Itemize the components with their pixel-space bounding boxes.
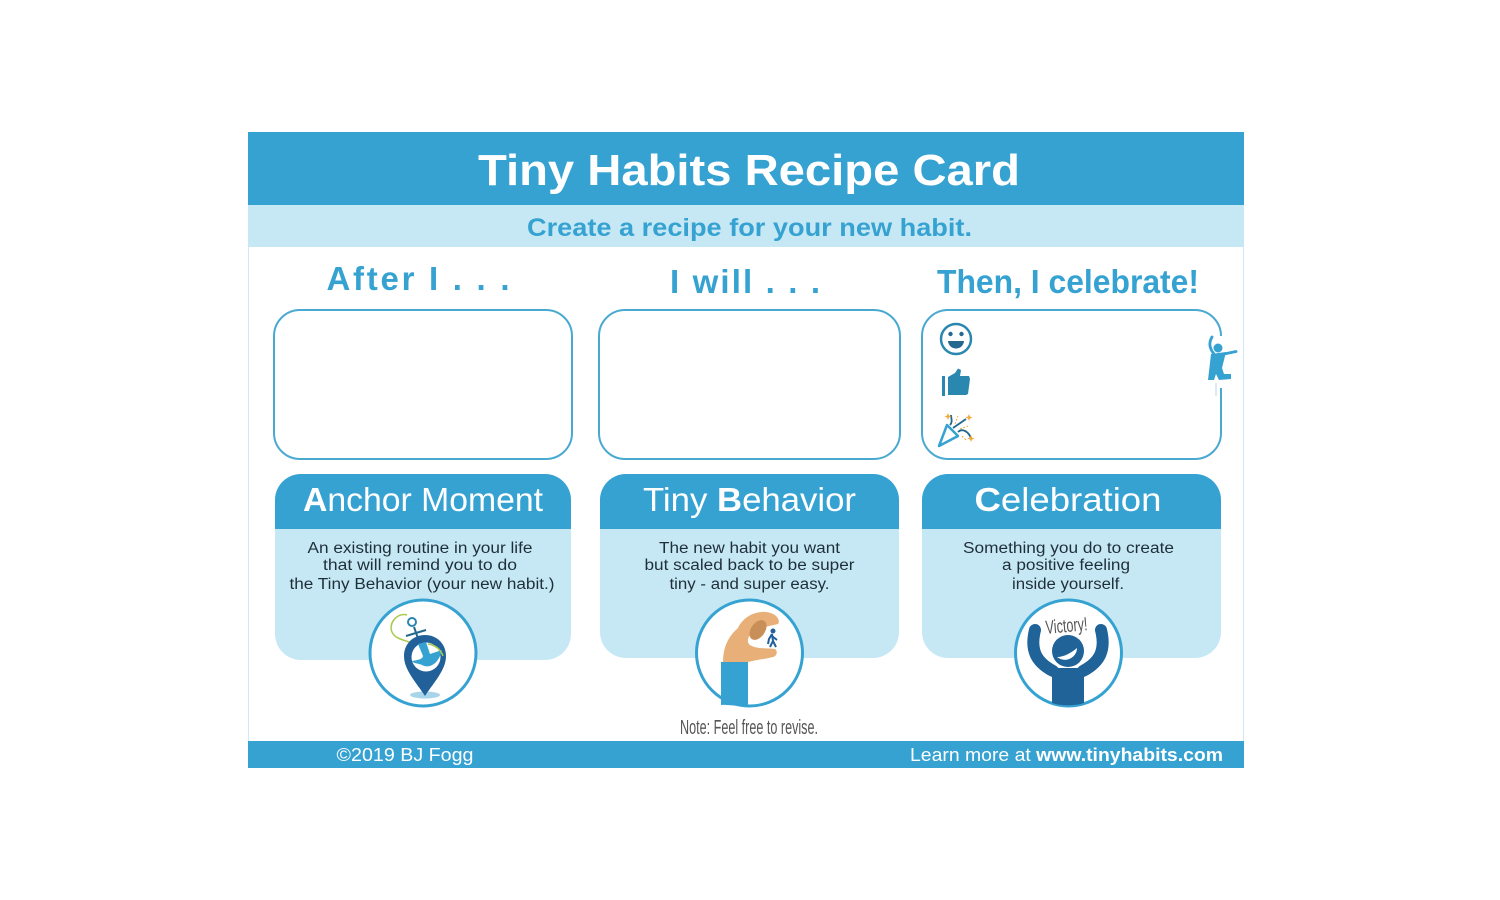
panel heading: Tiny Behavior: Tiny Behavior (643, 481, 856, 518)
description: Celebration: Something you do to create (963, 540, 1174, 557)
panel: Celebration (922, 474, 1221, 658)
description: Anchor Moment: that will remind you to do (323, 557, 517, 574)
description: Anchor Moment: the Tiny Behavior (your new habit.) (290, 576, 554, 593)
heading: After I: After I . . . (326, 260, 510, 297)
subtitle banner (248, 205, 1244, 247)
subtitle banner: Create a recipe for your new habit. (527, 214, 972, 242)
description: Tiny Behavior: The new habit you want (659, 540, 841, 557)
footer bar (248, 741, 1244, 768)
heading: I will: I will . . . (670, 263, 820, 300)
panel heading: Celebration: Celebration (974, 481, 1162, 518)
icon: victory person: Victory! (1045, 614, 1088, 639)
panel: Anchor Moment (275, 474, 571, 660)
input box: Then, I celebrate (922, 310, 1221, 459)
icon: thumbs up (942, 368, 970, 396)
input box: After I (274, 310, 572, 459)
description: Celebration: inside yourself. (1012, 576, 1124, 593)
panel: Tiny Behavior (600, 474, 899, 658)
description: Celebration (963, 540, 1174, 593)
icon: party popper (939, 413, 974, 446)
description: Tiny Behavior: but scaled back to be super (644, 557, 854, 574)
icon: jumping figure (1206, 337, 1236, 396)
title banner: Tiny Habits Recipe Card (478, 146, 1020, 195)
handwritten note: Note: Feel free to revise. (680, 717, 818, 739)
copyright: ©2019 BJ Fogg (336, 745, 474, 765)
icon: hand pinching tiny person (696, 600, 802, 706)
description: Tiny Behavior: tiny - and super easy. (670, 576, 830, 593)
description: Tiny Behavior (644, 540, 854, 593)
description: Anchor Moment (290, 540, 554, 593)
input box: I will (599, 310, 900, 459)
icon: anchor location pin (370, 600, 476, 706)
website link text: Learn more at www.tinyhabits.com (910, 745, 1223, 765)
panel heading: Anchor Moment: Anchor Moment (303, 481, 543, 518)
description: Anchor Moment: An existing routine in your life (308, 540, 532, 557)
title banner (248, 132, 1244, 205)
icon: victory person (1016, 600, 1122, 706)
icon: smiley face (941, 324, 971, 354)
heading: Then, I celebrate: Then, I celebrate! (937, 263, 1199, 300)
card background (248, 132, 1244, 768)
description: Celebration: a positive feeling (1002, 557, 1130, 574)
